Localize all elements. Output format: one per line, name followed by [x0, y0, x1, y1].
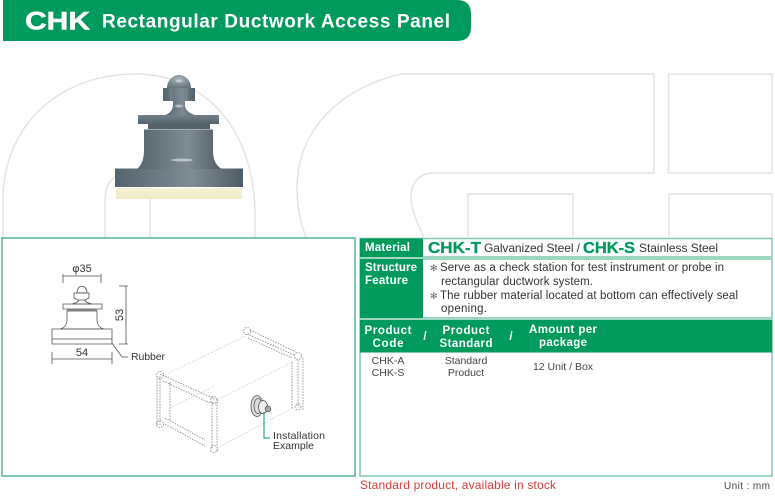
table header: Product: [442, 325, 490, 337]
dimension: diameter 35: φ35: [72, 263, 92, 275]
feature list: ✻: [430, 291, 438, 301]
feature list: ✻: [430, 263, 438, 273]
title text: Rectangular Ductwork Access Panel: [102, 12, 450, 32]
background watermark outlines: [3, 74, 772, 237]
table values: Product: [448, 367, 484, 379]
table header: Standard: [440, 338, 492, 350]
table values: Standard: [445, 355, 487, 367]
table header: [364, 324, 598, 350]
table values: 12 Unit / Box: [533, 361, 594, 373]
panel: product drawing: [2, 238, 355, 476]
product image: access panel fitting: [115, 75, 243, 199]
table values: CHK-S: [372, 367, 404, 379]
feature list: rectangular ductwork system.: [441, 276, 593, 288]
dimension: width 54: 54: [76, 347, 88, 359]
label: installation example: Example: [273, 440, 314, 452]
feature list: The rubber material located at bottom can effectively seal: [440, 290, 738, 302]
stock note: Standard product, available in stock: [360, 478, 557, 492]
unit note: Unit : mm: [724, 481, 770, 492]
table header: /: [509, 331, 513, 343]
table header: Amount per: [529, 324, 598, 336]
structure label: Feature: [365, 275, 408, 287]
label: installation example: Installation: [273, 430, 325, 442]
feature list: Serve as a check station for test instrument or probe in: [440, 262, 724, 274]
table header: Code: [372, 338, 404, 350]
feature list: opening.: [441, 303, 487, 315]
title banner: [3, 0, 471, 41]
structure label: Structure: [365, 262, 417, 274]
panel: material row: CHK-S: [583, 240, 635, 257]
label: rubber: Rubber: [131, 351, 166, 363]
panel: material row: [360, 238, 772, 257]
dimension: height 53: 53: [114, 309, 126, 321]
table header: /: [423, 331, 427, 343]
duct illustration: [156, 328, 303, 452]
material values: CHK-T: [428, 240, 481, 257]
installation leader: [264, 412, 270, 438]
material label: Material: [365, 242, 410, 254]
table values: [372, 355, 594, 379]
panel: material row: Stainless Steel: [639, 241, 718, 255]
panel: material row: Galvanized Steel /: [484, 241, 581, 255]
table header: Product: [364, 325, 412, 337]
table values: CHK-A: [372, 355, 404, 367]
table header: package: [539, 337, 587, 349]
title code: CHK: [25, 8, 90, 36]
panel: product table: [360, 320, 772, 476]
fitting on duct: [251, 396, 271, 416]
panel: structure feature row: [360, 259, 772, 318]
dimension drawing: [52, 274, 128, 364]
